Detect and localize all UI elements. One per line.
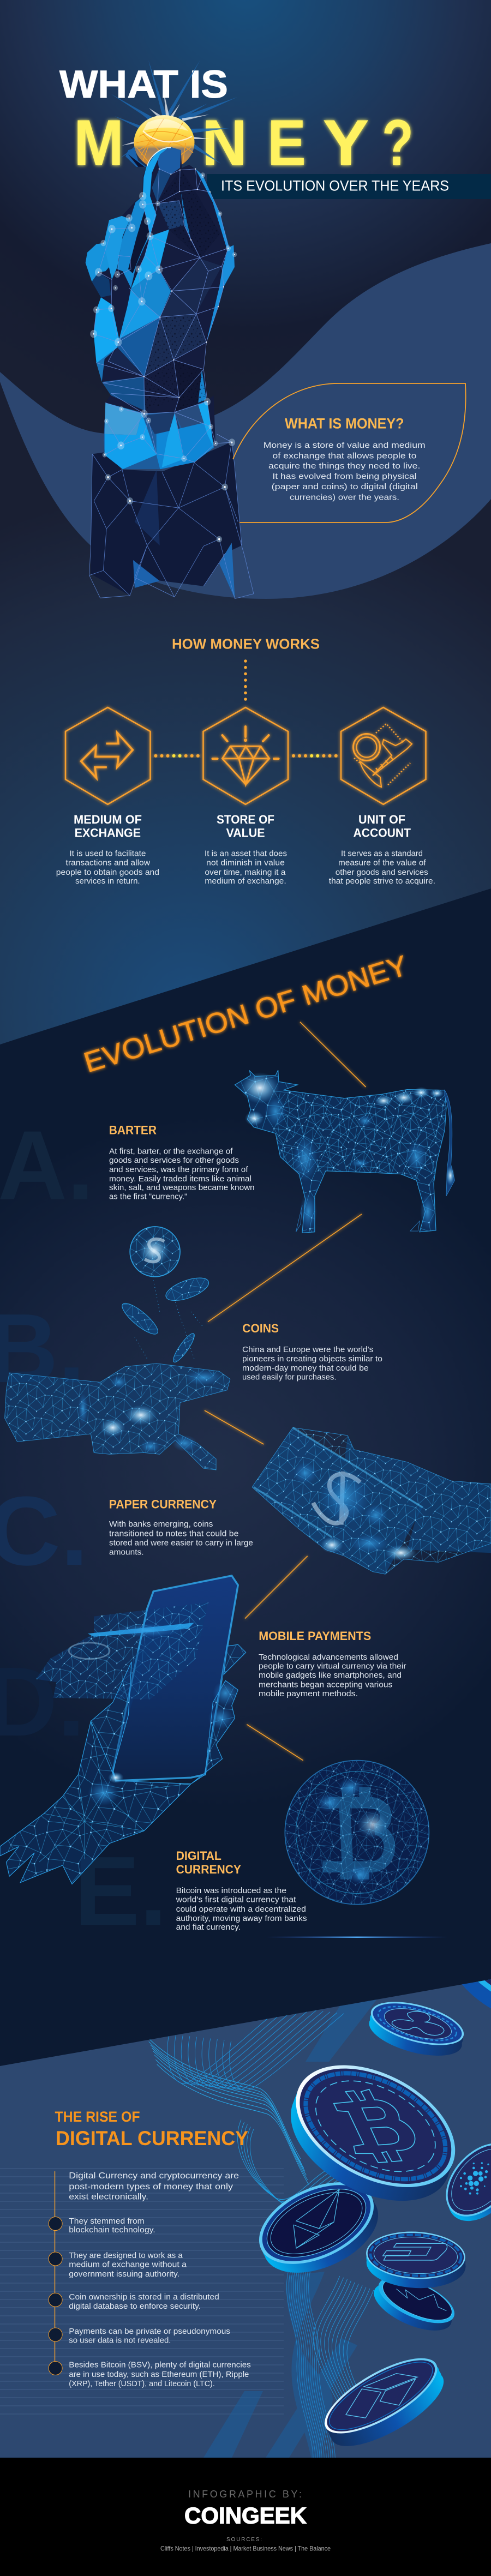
text block: fact 1 xyxy=(69,2217,155,2235)
panel heading: WHAT IS MONEY? xyxy=(285,416,404,432)
text block: barter xyxy=(109,1124,255,1201)
text block: barter: goods and services for other goods xyxy=(109,1156,239,1165)
hand holding coin, low-poly xyxy=(86,147,254,599)
column: medium of exchange: services in return. xyxy=(75,876,140,886)
column: unit of account: ACCOUNT xyxy=(354,826,411,839)
glowing coin with rays xyxy=(111,60,237,170)
text block: fact 2: They are designed to work as a xyxy=(69,2251,183,2260)
text block: mobile payments: MOBILE PAYMENTS xyxy=(259,1629,371,1643)
text block: coins: pioneers in creating objects similar to xyxy=(242,1354,382,1364)
hand and cuff xyxy=(86,147,237,469)
text block: digital currency intro: post-modern types of money that only xyxy=(69,2182,233,2191)
coin: gnosis xyxy=(314,2344,454,2460)
column: store of value: over time, making it a xyxy=(205,868,286,877)
text block: paper currency: With banks emerging, coins xyxy=(109,1520,213,1529)
text block: fact 3: Coin ownership is stored in a distributed xyxy=(69,2293,219,2302)
footer xyxy=(0,2458,491,2576)
text block: barter: BARTER xyxy=(109,1124,157,1137)
title line: what is: WHAT IS xyxy=(59,63,228,106)
column: store of value: medium of exchange. xyxy=(205,876,286,886)
panel body text: currencies) over the years. xyxy=(290,493,399,502)
column: medium of exchange xyxy=(56,813,159,886)
text block: digital currency intro: exist electronically. xyxy=(69,2193,148,2202)
column: unit of account xyxy=(329,813,435,886)
text block: barter: At first, barter, or the exchange of xyxy=(109,1146,233,1156)
timeline xyxy=(49,2171,62,2375)
text block: paper currency xyxy=(109,1498,253,1557)
text block: mobile payments: merchants began accepting various xyxy=(259,1680,392,1689)
coin: bitcoin xyxy=(270,2040,476,2226)
dotted connector left xyxy=(154,754,200,758)
heading: the rise of digital currency: THE RISE OF xyxy=(55,2109,140,2125)
text block: fact 3 xyxy=(69,2293,219,2311)
text block: fact 4 xyxy=(69,2327,230,2345)
panel: evolution background xyxy=(0,888,491,2066)
text block: digital currency: authority, moving away from banks xyxy=(176,1914,307,1923)
illustration: mesh bitcoin sphere xyxy=(285,1761,429,1905)
illustration: paper money in hand xyxy=(252,1428,491,1574)
column: store of value: It is an asset that does xyxy=(205,849,287,858)
subtitle bar: ITS EVOLUTION OVER THE YEARS xyxy=(221,178,449,194)
text block: fact 4: so user data is not revealed. xyxy=(69,2337,171,2345)
text block: digital currency intro xyxy=(69,2171,239,2202)
logo wordmark: COINGEEK xyxy=(184,2503,307,2529)
panel body text: It has evolved from being physical xyxy=(272,472,417,481)
column: store of value: not diminish in value xyxy=(206,858,285,868)
column: unit of account: UNIT OF xyxy=(358,813,405,826)
watermark letter A: A. xyxy=(0,1110,94,1221)
coin: ethereum xyxy=(246,2166,391,2289)
panel body text xyxy=(264,441,426,502)
wave shape behind hand xyxy=(0,243,491,599)
text block: digital currency: Bitcoin was introduced as the xyxy=(176,1886,286,1895)
illustration: mobile phone in hand xyxy=(0,1576,246,1884)
illustration: falling coins and hand xyxy=(5,1227,230,1470)
shirt sleeve xyxy=(89,442,254,599)
text block: mobile payments: mobile gadgets like smartphones, and xyxy=(259,1671,402,1680)
heading: the rise of digital currency: DIGITAL CURRENCY xyxy=(56,2127,248,2149)
illustration: mesh cow xyxy=(235,1070,454,1233)
column: unit of account: measure of the value of xyxy=(338,858,427,868)
column: unit of account: other goods and services xyxy=(336,868,428,877)
column: store of value: STORE OF xyxy=(217,813,274,826)
column: medium of exchange: transactions and allow xyxy=(65,858,150,868)
title line: money: O xyxy=(139,106,191,179)
panel body text: acquire the things they need to live. xyxy=(268,461,420,471)
text block: fact 2 xyxy=(69,2251,187,2279)
sources list: Cliffs Notes | Investopedia | Market Business News | The Balance xyxy=(160,2545,331,2553)
subtitle bar xyxy=(207,174,491,199)
footer credit label: INFOGRAPHIC BY: xyxy=(188,2489,302,2500)
column: store of value: VALUE xyxy=(226,826,265,839)
coin: dash xyxy=(365,2229,467,2291)
watermark letter E: E. xyxy=(74,1836,167,1946)
text block: coins xyxy=(242,1322,382,1382)
title xyxy=(59,63,414,179)
text block: mobile payments xyxy=(259,1629,406,1698)
text block: digital currency: DIGITAL xyxy=(176,1849,221,1863)
text block: digital currency: and fiat currency. xyxy=(176,1923,241,1932)
heading: evolution of money: EVOLUTION OF MONEY xyxy=(80,950,411,1079)
text block: paper currency: PAPER CURRENCY xyxy=(109,1498,217,1511)
text block: barter: money. Easily traded items like animal xyxy=(109,1174,252,1184)
text block: coins: China and Europe were the world's xyxy=(242,1345,373,1354)
text block: fact 3: digital database to enforce security. xyxy=(69,2302,201,2311)
sources label: SOURCES: xyxy=(226,2537,262,2543)
coin: cardano xyxy=(432,2130,491,2235)
title line: money: ? xyxy=(382,106,414,179)
column: medium of exchange: EXCHANGE xyxy=(75,826,141,839)
hexagon icon: store of value xyxy=(203,707,288,804)
text block: fact 5: (XRP), Tether (USDT), and Litecoin (LTC). xyxy=(69,2380,215,2388)
text block: paper currency: amounts. xyxy=(109,1548,144,1557)
text block: mobile payments: mobile payment methods. xyxy=(259,1689,358,1698)
text block: paper currency: stored and were easier to carry in large xyxy=(109,1538,253,1547)
text block: barter: skin, salt, and weapons became known xyxy=(109,1183,255,1192)
panel body text: Money is a store of value and medium xyxy=(264,441,426,450)
column: store of value xyxy=(205,813,287,886)
column: medium of exchange: people to obtain goods and xyxy=(56,868,159,877)
dotted connector right xyxy=(292,754,338,758)
coin: ripple xyxy=(364,1993,468,2064)
hexagon icon: unit of account xyxy=(341,707,426,804)
top glow background xyxy=(0,0,491,436)
text block: fact 1: They stemmed from xyxy=(69,2217,145,2226)
text block: digital currency xyxy=(176,1849,307,1932)
text block: fact 2: government issuing authority. xyxy=(69,2270,179,2279)
heading: the rise of digital currency xyxy=(55,2109,248,2149)
column: unit of account: It serves as a standard xyxy=(341,849,423,858)
page background: upper section xyxy=(0,0,491,1064)
text block: digital currency: CURRENCY xyxy=(176,1863,241,1876)
coin: top right, clipped xyxy=(462,1979,491,2008)
title line: money: Y xyxy=(322,106,369,179)
text block: mobile payments: Technological advancements allowed xyxy=(259,1653,398,1662)
text block: fact 2: medium of exchange without a xyxy=(69,2261,187,2269)
column: medium of exchange: It is used to facilitate xyxy=(69,849,146,858)
coin: monero xyxy=(367,2268,461,2340)
text block: paper currency: transitioned to notes that could be xyxy=(109,1529,238,1539)
panel: rise of digital currency background xyxy=(0,1979,491,2458)
text block: coins: modern-day money that could be xyxy=(242,1364,369,1373)
text block: coins: used easily for purchases. xyxy=(242,1373,336,1382)
text block: digital currency: world's first digital currency that xyxy=(176,1895,296,1905)
orange connector lines xyxy=(205,1022,366,1761)
text block: fact 5: Besides Bitcoin (BSV), plenty of digital currencies xyxy=(69,2361,251,2370)
column: medium of exchange: MEDIUM OF xyxy=(74,813,142,826)
text block: barter: as the first "currency." xyxy=(109,1192,187,1201)
leaf outline xyxy=(233,383,466,523)
text block: coins: COINS xyxy=(242,1322,279,1335)
heading: how money works: HOW MONEY WORKS xyxy=(172,636,320,652)
text block: fact 4: Payments can be private or pseudonymous xyxy=(69,2327,230,2336)
text block: mobile payments: people to carry virtual currency via their xyxy=(259,1661,406,1671)
hexagon icon: medium of exchange xyxy=(65,707,151,804)
text block: digital currency intro: Digital Currency and cryptocurrency are xyxy=(69,2171,239,2181)
title line: money: M xyxy=(74,106,124,179)
panel body text: (paper and coins) to digital (digital xyxy=(272,482,418,491)
glow line under bitcoin xyxy=(266,1936,448,1938)
title line: money: N xyxy=(202,106,247,179)
text block: fact 1: blockchain technology. xyxy=(69,2226,155,2235)
text block: barter: and services, was the primary form of xyxy=(109,1165,248,1174)
text block: digital currency: could operate with a decentralized xyxy=(176,1905,306,1914)
column: unit of account: that people strive to acquire. xyxy=(329,876,435,886)
dotted connector vertical xyxy=(244,659,247,701)
panel: what is money xyxy=(233,383,466,523)
text block: fact 5 xyxy=(69,2361,251,2388)
title line: money: E xyxy=(267,106,306,179)
text block: fact 5: are in use today, such as Ethereum (ETH), Ripple xyxy=(69,2370,249,2379)
panel body text: of exchange that allows people to xyxy=(272,452,417,461)
